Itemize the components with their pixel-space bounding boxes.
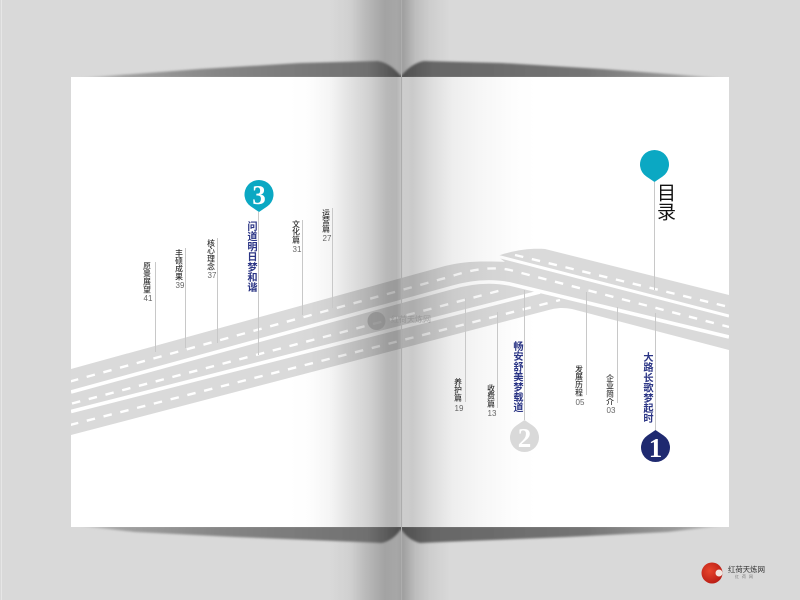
label: 愿景展望 41 xyxy=(142,262,153,303)
label: 核心理念 37: 37 xyxy=(208,271,217,280)
label: 企业简介 03 xyxy=(605,373,616,415)
brand logo xyxy=(702,562,765,584)
heading: 大路长歌梦起时: 大路长歌梦起时 xyxy=(641,351,653,424)
bottom page shadow xyxy=(80,526,722,543)
label: 丰硕成果 39: 丰硕成果 xyxy=(174,248,184,281)
right leader lines xyxy=(466,182,656,430)
label: 运营篇 27: 27 xyxy=(323,234,332,243)
highway roads xyxy=(70,249,729,435)
label: 养护篇 19 xyxy=(453,377,464,413)
label: 愿景展望 41: 41 xyxy=(144,294,153,303)
pin: section 2: 2 xyxy=(518,423,531,453)
label: 丰硕成果 39: 39 xyxy=(176,281,185,290)
label: 愿景展望 41: 愿景展望 xyxy=(142,262,152,293)
label: 文化篇 31 xyxy=(291,219,302,254)
brand logo: 红荷天炼网 xyxy=(728,565,765,574)
label: 养护篇 19: 养护篇 xyxy=(453,377,462,402)
heading: 畅安舒美梦载道: 畅安舒美梦载道 xyxy=(511,340,523,413)
label: 收费篇 13: 收费篇 xyxy=(486,383,496,408)
pin: section 1 xyxy=(641,430,670,463)
label: 收费篇 13: 13 xyxy=(488,409,497,418)
label: 收费篇 13 xyxy=(486,383,497,418)
watermark logo xyxy=(368,312,431,330)
pin: section 3: 3 xyxy=(252,180,266,210)
label: 发展历程 05: 发展历程 xyxy=(574,364,584,397)
top page shadow xyxy=(80,61,722,78)
label: 核心理念 37 xyxy=(206,238,217,280)
pin: section 1: 1 xyxy=(649,433,662,463)
label: 运营篇 27 xyxy=(321,209,332,243)
pin: contents xyxy=(640,150,669,182)
label: 文化篇 31: 31 xyxy=(293,245,302,254)
label: 养护篇 19: 19 xyxy=(455,404,464,413)
label: 文化篇 31: 文化篇 xyxy=(291,219,300,244)
label: 核心理念 37: 核心理念 xyxy=(206,238,216,270)
pin: section 3 xyxy=(244,180,273,212)
spine line xyxy=(401,0,402,600)
pin: section 2 xyxy=(510,420,539,453)
heading: 问道明日梦和谐: 问道明日梦和谐 xyxy=(245,220,257,293)
label: 发展历程 05 xyxy=(574,364,585,407)
page gutter shading xyxy=(71,77,729,527)
open book pages xyxy=(71,77,729,527)
watermark logo: 红荷天炼网 xyxy=(391,314,431,324)
label: 丰硕成果 39 xyxy=(174,248,185,290)
brand logo: 红荷网 xyxy=(735,573,756,579)
label: 运营篇 27: 运营篇 xyxy=(321,209,330,233)
left leader lines xyxy=(156,208,332,355)
left edge highlight xyxy=(1,0,2,600)
label: 企业简介 03: 03 xyxy=(607,406,616,415)
label: 企业简介 03: 企业简介 xyxy=(605,373,614,405)
title: 目录 xyxy=(654,183,675,221)
label: 发展历程 05: 05 xyxy=(576,398,585,407)
